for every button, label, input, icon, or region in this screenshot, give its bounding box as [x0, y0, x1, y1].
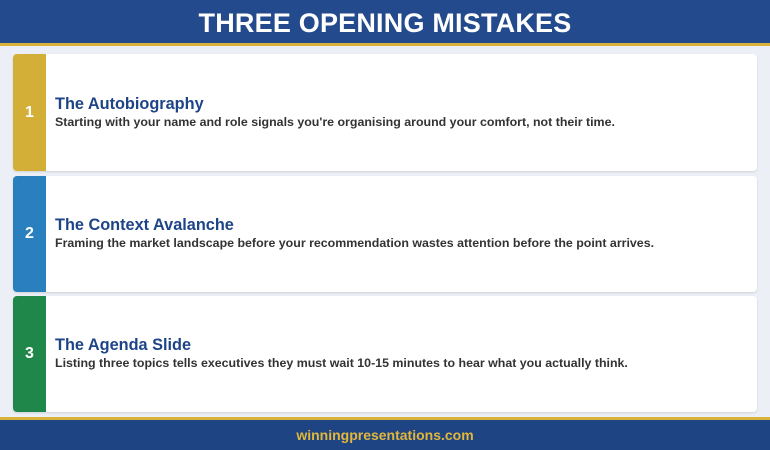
text 3: The Agenda Slide: [55, 336, 191, 354]
title: [0, 0, 770, 46]
number badge 3: [13, 296, 46, 412]
number badge 3: 3: [25, 345, 34, 362]
text 1: The Autobiography: [55, 94, 204, 112]
number badge 2: [13, 176, 46, 292]
card 2: context avalanche: [13, 176, 757, 292]
number badge 1: [13, 54, 46, 171]
card 3: agenda slide: [13, 296, 757, 412]
text 2: The Context Avalanche: [55, 216, 234, 234]
text 1: Starting with your name and role signals you're organising around your comfort, not their time.: [55, 114, 615, 128]
number badge 2: 2: [25, 225, 34, 242]
text 3: Listing three topics tells executives they must wait 10-15 minutes to hear what you actually think.: [55, 356, 628, 370]
card 1: autobiography: [13, 54, 757, 171]
footer: [0, 417, 770, 450]
text 2: [55, 216, 654, 250]
number badge 1: 1: [25, 104, 34, 120]
text 2: Framing the market landscape before your recommendation wastes attention before the point arrives.: [55, 236, 654, 250]
footer: winningpresentations.com: [296, 427, 474, 443]
text 3: [55, 336, 628, 370]
text 1: [55, 94, 615, 128]
title: THREE OPENING MISTAKES: [199, 8, 571, 38]
